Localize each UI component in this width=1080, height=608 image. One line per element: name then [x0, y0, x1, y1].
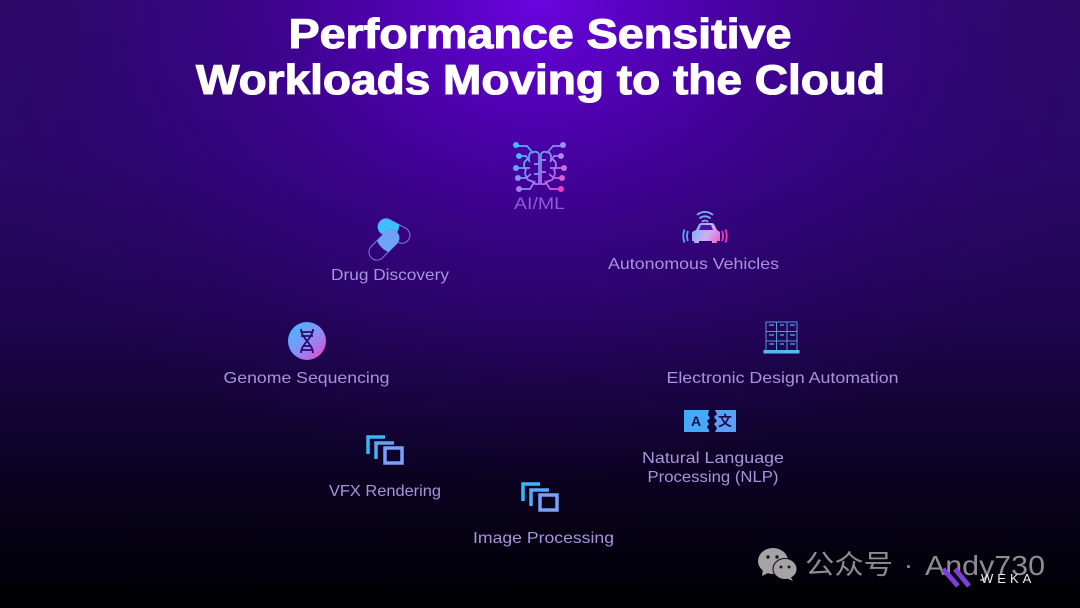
- icon: translate: 文: [718, 413, 732, 429]
- title: Performance Sensitive: [288, 10, 792, 57]
- icon: circuit brain: [513, 142, 567, 192]
- label: Drug Discovery: Drug Discovery: [331, 267, 449, 284]
- icon: translate: A: [691, 413, 701, 429]
- label: Natural Language Processing (NLP): Natural Language: [642, 450, 784, 467]
- logo: WEKA: [943, 569, 1035, 586]
- title: Workloads Moving to the Cloud: [196, 56, 885, 103]
- watermark: WeChat account: [758, 548, 1045, 581]
- label: Electronic Design Automation: Electronic Design Automation: [666, 370, 898, 387]
- title: [196, 10, 885, 103]
- label: Natural Language Processing (NLP): Processing (NLP): [648, 469, 778, 486]
- icon: translate: [684, 410, 736, 432]
- label: Genome Sequencing: Genome Sequencing: [224, 370, 390, 387]
- item: Genome Sequencing: [224, 322, 390, 387]
- item: Drug Discovery: [331, 216, 449, 284]
- label: Autonomous Vehicles: Autonomous Vehicles: [608, 256, 779, 273]
- icon: WeChat bubbles: [758, 548, 797, 581]
- text: account name: 公众号: [805, 550, 893, 580]
- icon: stacked frames: [368, 437, 402, 463]
- item: VFX Rendering: [329, 437, 441, 500]
- icon: DNA circle: [288, 322, 326, 360]
- label: VFX Rendering: VFX Rendering: [329, 483, 441, 500]
- item: Electronic Design Automation: [666, 322, 898, 387]
- icon: stacked frames: [523, 484, 557, 510]
- label: Image Processing: Image Processing: [473, 530, 614, 547]
- label: Natural Language Processing (NLP): [642, 450, 784, 486]
- item: Image Processing: [473, 484, 614, 547]
- watermark: WeChat account: Andy730: [925, 550, 1045, 581]
- item: AI/ML: [513, 142, 567, 213]
- icon: capsules: [366, 216, 413, 263]
- item: Natural Language Processing: [642, 410, 784, 486]
- watermark: WeChat account: ·: [904, 550, 913, 580]
- item: Autonomous Vehicles: [608, 212, 779, 273]
- icon: chip grid: [764, 322, 799, 353]
- label: AI/ML: AI/ML: [514, 194, 565, 213]
- icon: connected car: [683, 212, 727, 243]
- logo: WEKA: WEKA: [981, 571, 1035, 586]
